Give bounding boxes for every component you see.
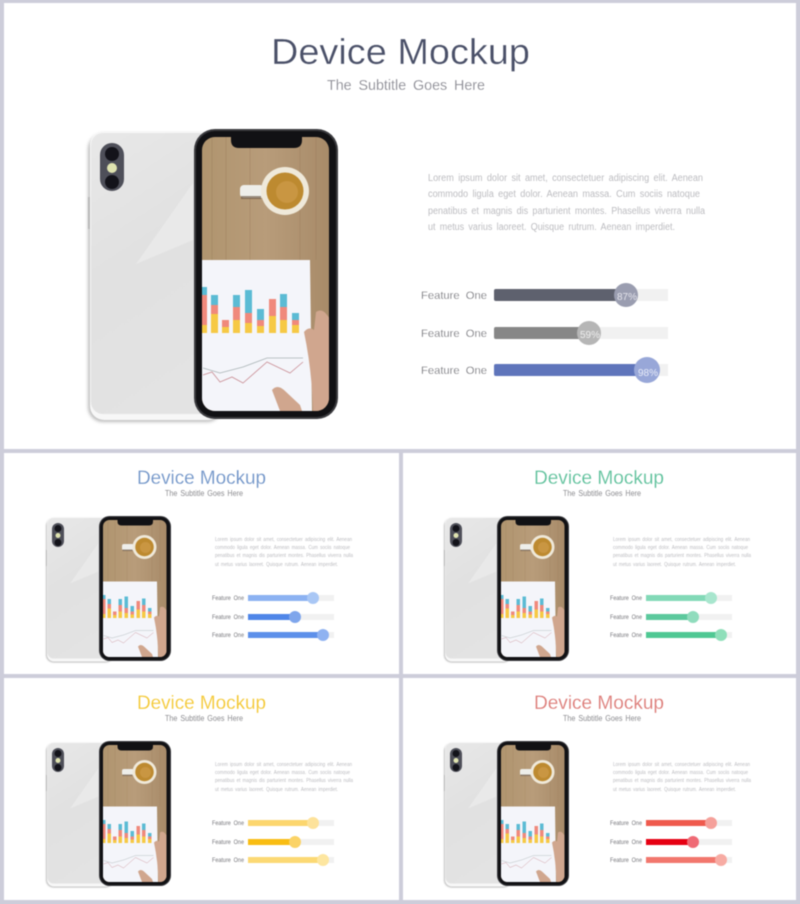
panel: yellow slide	[4, 678, 399, 900]
description text: commodo ligula eget dolor. Aenean massa. Cum sociis natoque	[428, 189, 700, 200]
hand	[272, 311, 331, 411]
red description text: ut metus varius laoreet. Quisque rutrum. Aenean imperdiet.	[613, 787, 736, 793]
blue phone mockup	[46, 516, 171, 662]
blue description text: penatibus et magnis dis parturient montes. Phasellus viverra nulla	[215, 553, 353, 559]
red subtitle: The Subtitle Goes Here	[563, 714, 641, 723]
description text: penatibus et magnis dis parturient montes. Phasellus viverra nulla	[428, 206, 705, 217]
progress bar: feature one 98%: Feature One	[421, 365, 487, 377]
green title: Device Mockup	[534, 468, 664, 489]
red title: Device Mockup	[534, 693, 664, 714]
red progress bars: Feature One	[610, 858, 643, 864]
paper line chart	[203, 358, 303, 383]
green progress bars: Feature One	[610, 615, 643, 621]
paper bar chart	[200, 287, 299, 333]
red phone mockup	[444, 741, 569, 888]
yellow description text: commodo ligula eget dolor. Aenean massa. Cum sociis natoque	[215, 770, 350, 776]
yellow subtitle: The Subtitle Goes Here	[165, 714, 243, 723]
progress bar: feature one 87%: 87%	[617, 292, 637, 303]
blue progress bars: Feature One	[212, 633, 245, 639]
red progress bars: Feature One	[610, 821, 643, 827]
progress bar: feature one 98%: 98%	[638, 368, 658, 379]
green progress bars	[610, 592, 732, 641]
green description text: penatibus et magnis dis parturient montes. Phasellus viverra nulla	[613, 553, 751, 559]
green description text: commodo ligula eget dolor. Aenean massa. Cum sociis natoque	[613, 545, 748, 551]
red description text: commodo ligula eget dolor. Aenean massa. Cum sociis natoque	[613, 770, 748, 776]
progress bar: feature one 59%: 59%	[580, 330, 600, 341]
progress bar: feature one 98%	[421, 357, 668, 383]
red description text	[613, 762, 751, 793]
panel: main slide	[4, 3, 796, 449]
blue title: Device Mockup	[137, 468, 266, 489]
yellow progress bars: Feature One	[212, 821, 245, 827]
yellow progress bars: Feature One	[212, 858, 245, 864]
blue subtitle: The Subtitle Goes Here	[165, 489, 243, 498]
yellow description text: Lorem ipsum dolor sit amet, consectetuer adipiscing elit. Aenean	[215, 762, 352, 768]
green progress bars: Feature One	[610, 633, 643, 639]
yellow description text	[215, 762, 353, 793]
red progress bars	[610, 817, 732, 866]
description text: Lorem ipsum dolor sit amet, consectetuer adipiscing elit. Aenean	[428, 173, 703, 184]
blue progress bars: Feature One	[212, 615, 245, 621]
blue description text: ut metus varius laoreet. Quisque rutrum. Aenean imperdiet.	[215, 562, 338, 568]
blue description text: Lorem ipsum dolor sit amet, consectetuer adipiscing elit. Aenean	[215, 537, 352, 543]
panel: red slide	[403, 678, 796, 900]
progress bar: feature one 59%	[421, 321, 668, 345]
blue description text	[215, 537, 353, 568]
progress bar: feature one 59%: Feature One	[421, 328, 487, 340]
yellow title: Device Mockup	[137, 693, 266, 714]
yellow progress bars	[212, 817, 334, 866]
coffee cup	[240, 167, 309, 215]
blue description text: commodo ligula eget dolor. Aenean massa. Cum sociis natoque	[215, 545, 350, 551]
green description text: ut metus varius laoreet. Quisque rutrum. Aenean imperdiet.	[613, 562, 736, 568]
green description text: Lorem ipsum dolor sit amet, consectetuer adipiscing elit. Aenean	[613, 537, 750, 543]
paper with charts	[200, 260, 312, 411]
red description text: Lorem ipsum dolor sit amet, consectetuer adipiscing elit. Aenean	[613, 762, 750, 768]
subtitle: The Subtitle Goes Here	[327, 77, 485, 94]
red description text: penatibus et magnis dis parturient montes. Phasellus viverra nulla	[613, 778, 751, 784]
phone back	[88, 131, 222, 422]
yellow description text: ut metus varius laoreet. Quisque rutrum. Aenean imperdiet.	[215, 787, 338, 793]
camera module	[100, 143, 124, 191]
yellow phone mockup	[46, 741, 171, 888]
blue progress bars: Feature One	[212, 596, 245, 602]
green progress bars: Feature One	[610, 596, 643, 602]
notch	[231, 136, 302, 148]
panel: blue slide	[4, 453, 399, 674]
title: Device Mockup	[271, 31, 530, 72]
yellow description text: penatibus et magnis dis parturient montes. Phasellus viverra nulla	[215, 778, 353, 784]
green description text	[613, 537, 751, 568]
yellow progress bars: Feature One	[212, 840, 245, 846]
panel: green slide	[403, 453, 796, 674]
progress bar: feature one 87%	[421, 283, 668, 307]
blue progress bars	[212, 592, 334, 641]
green phone mockup	[444, 516, 569, 662]
phone mockup	[88, 129, 338, 422]
red progress bars: Feature One	[610, 840, 643, 846]
description text	[428, 173, 705, 233]
progress bar: feature one 87%: Feature One	[421, 290, 487, 302]
description text: ut metus varius laoreet. Quisque rutrum. Aenean imperdiet.	[428, 222, 675, 233]
green subtitle: The Subtitle Goes Here	[563, 489, 641, 498]
phone front	[194, 129, 338, 419]
